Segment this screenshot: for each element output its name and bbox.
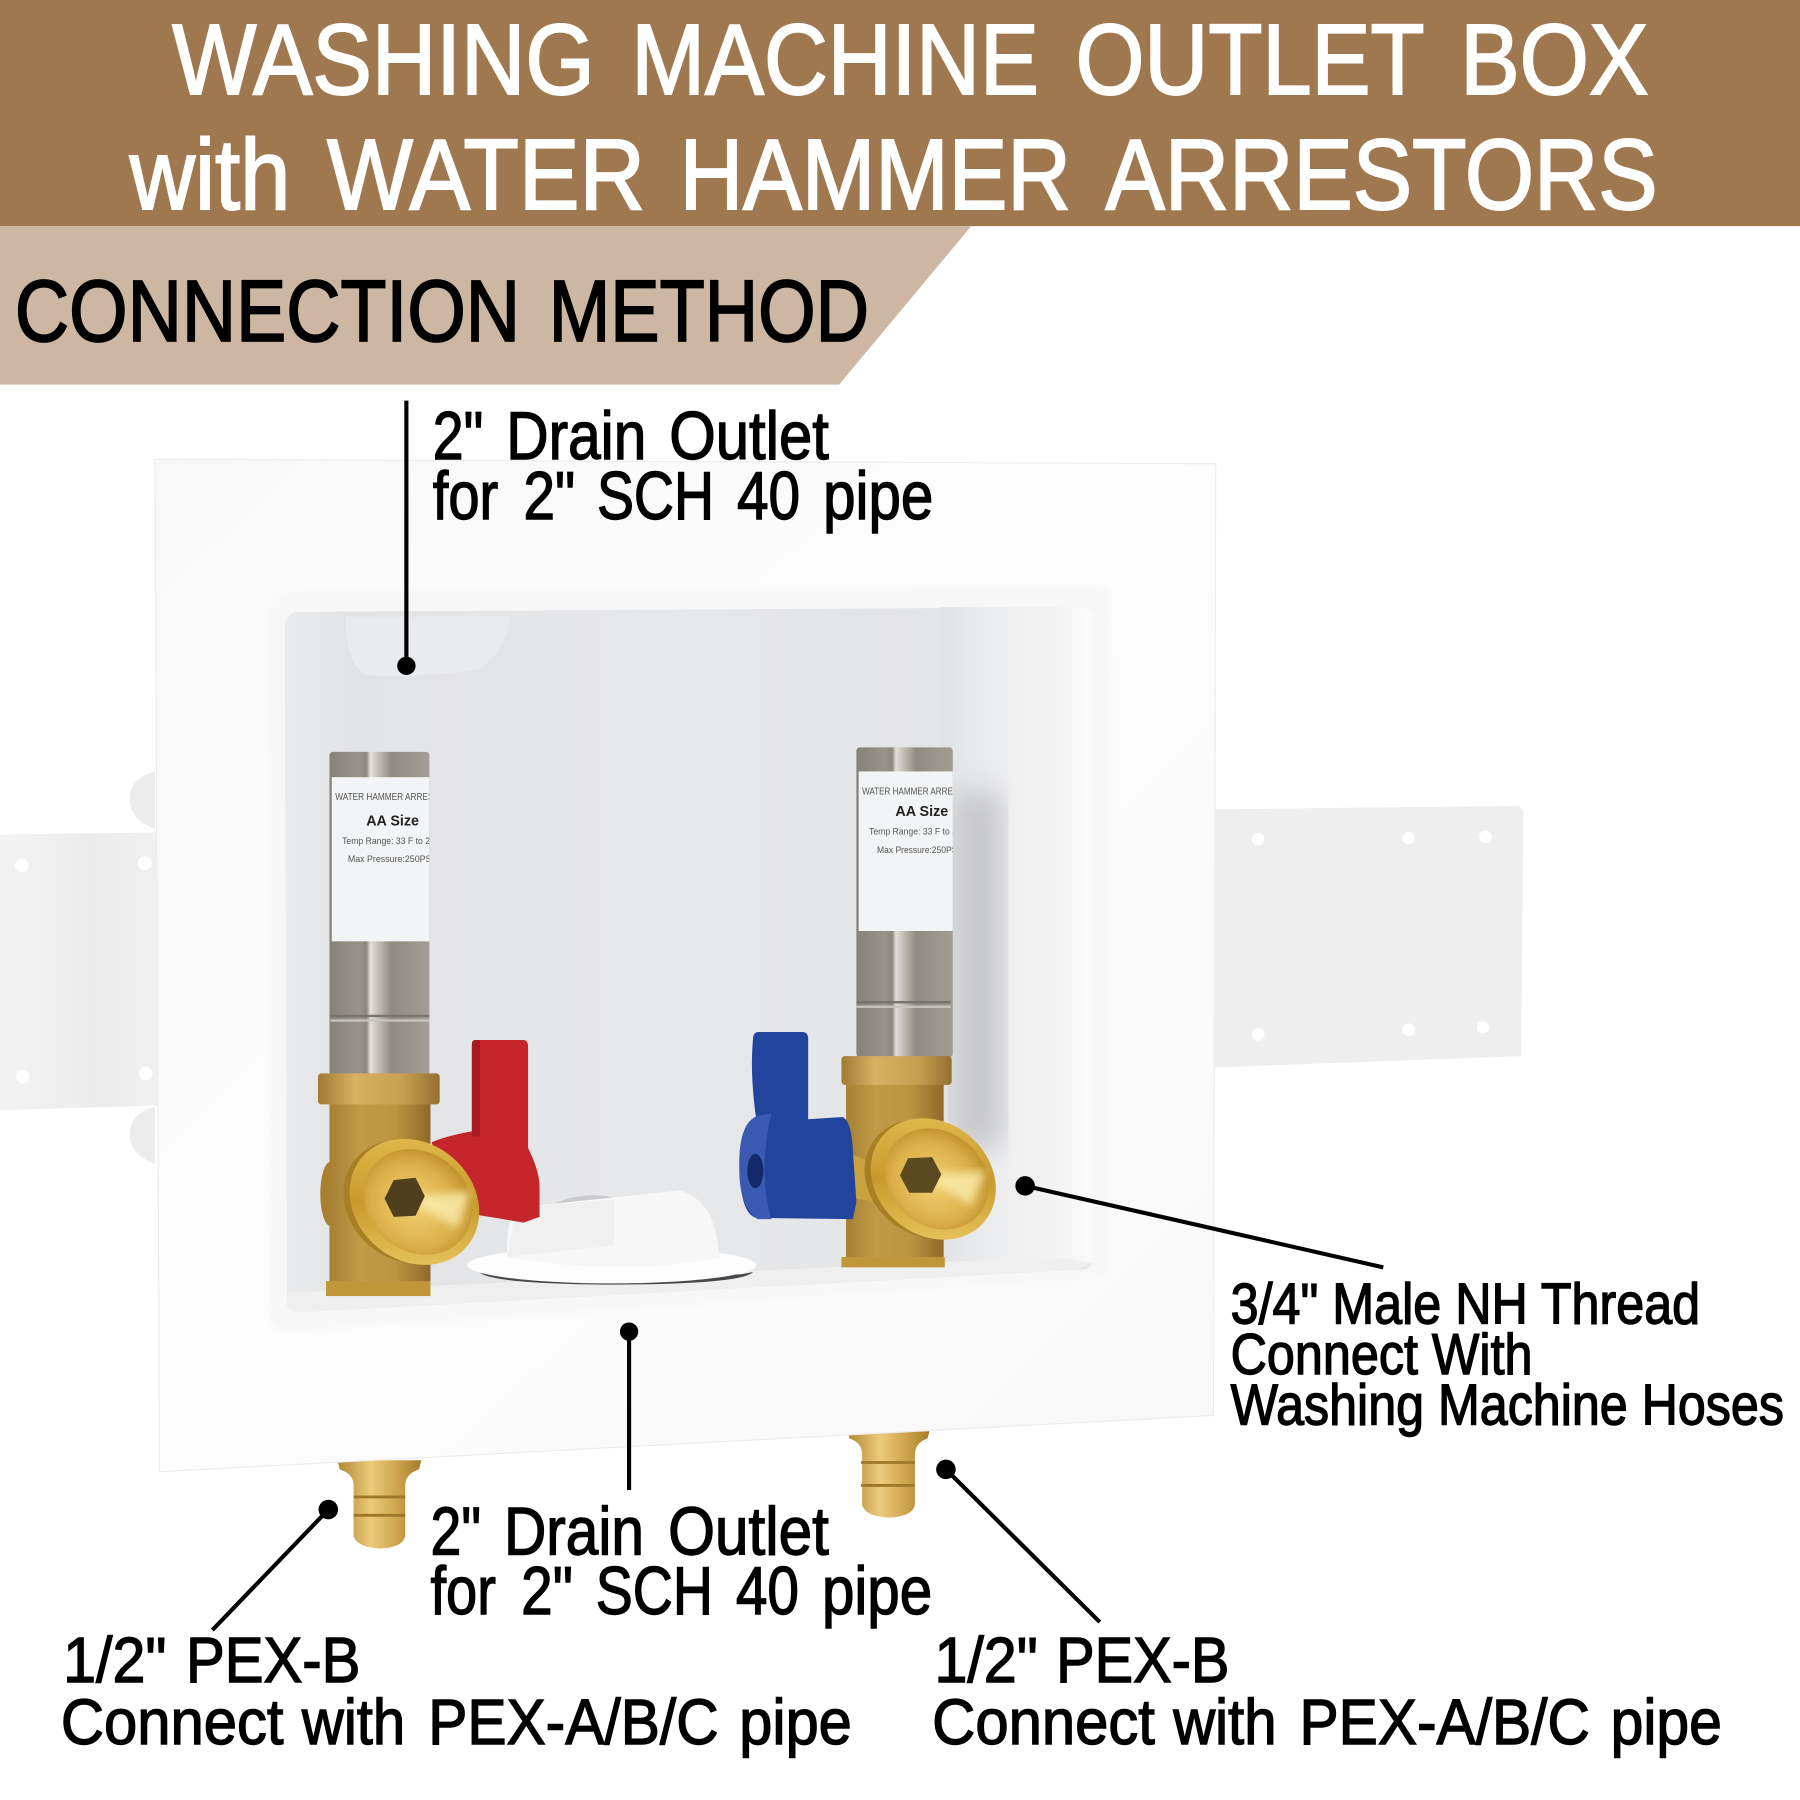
callout: top drain outlet: 2" xyxy=(433,399,483,474)
callout: top drain outlet: 2" xyxy=(523,459,575,534)
callout: left PEX-B xyxy=(61,1500,852,1758)
title banner: WATER xyxy=(327,120,645,231)
right mounting flange xyxy=(1211,806,1523,1068)
callout: bottom drain outlet: 2" xyxy=(430,1494,481,1569)
callout: right PEX-B: with xyxy=(1172,1686,1277,1758)
product illustration: outlet box xyxy=(0,459,1523,1549)
callout: bottom drain outlet: 2" xyxy=(521,1554,573,1629)
callout: top drain outlet: 40 xyxy=(737,459,800,534)
callout: left PEX-B: pipe xyxy=(739,1686,852,1758)
callout: left PEX-B: 1/2" xyxy=(63,1624,166,1696)
box face xyxy=(155,459,1216,1472)
callout: right PEX-B: Connect xyxy=(932,1686,1155,1758)
brass valve stem xyxy=(849,1154,875,1202)
PEX fitting: left xyxy=(338,1460,421,1549)
arrestor label text: Max Pressure:250PSI xyxy=(348,854,434,864)
title banner: WASHING xyxy=(172,5,595,116)
callout: bottom drain outlet: Drain xyxy=(504,1494,644,1569)
callout: right PEX-B xyxy=(932,1460,1722,1758)
callout: left PEX-B: PEX-A/B/C xyxy=(428,1686,719,1758)
title banner: ARRESTORS xyxy=(1105,120,1658,231)
callout: top drain outlet: Outlet xyxy=(669,399,829,474)
callout: hose thread: Connect With xyxy=(1231,1323,1533,1387)
recess floor ledge xyxy=(287,1257,1095,1312)
callout: right PEX-B: 1/2" xyxy=(934,1624,1038,1696)
top drain opening xyxy=(346,616,510,676)
recess right side wall xyxy=(940,607,1093,1263)
section heading: connection method: CONNECTION xyxy=(15,263,520,360)
section heading: connection method: METHOD xyxy=(549,263,869,360)
brass body xyxy=(846,1079,944,1260)
callout: bottom drain outlet: for xyxy=(430,1554,496,1629)
callout: top drain outlet: SCH xyxy=(597,459,714,534)
red handle xyxy=(432,1040,540,1223)
callout: top drain outlet: Drain xyxy=(506,399,646,474)
callout: hose thread xyxy=(1015,1176,1784,1438)
arrestor label text: WATER HAMMER ARREST xyxy=(862,786,963,797)
blue handle xyxy=(740,1032,856,1219)
callout: hose thread: 3/4" Male NH Thread xyxy=(1231,1273,1700,1337)
callout: bottom drain outlet: pipe xyxy=(822,1554,932,1629)
callout: right PEX-B: PEX-B xyxy=(1056,1624,1229,1696)
recess back wall xyxy=(285,607,1093,1312)
arrestor label text xyxy=(335,793,430,862)
arrestor label text: Temp Range: 33 F to 200 xyxy=(869,827,967,837)
arrestor label text: AA Size xyxy=(895,804,948,820)
arrestor label text xyxy=(862,788,953,853)
callout: bottom drain outlet xyxy=(430,1322,932,1629)
brass body xyxy=(320,1162,341,1226)
callout: top drain outlet xyxy=(397,399,933,675)
callout: right PEX-B: PEX-A/B/C xyxy=(1299,1686,1590,1758)
callout: bottom drain outlet: 40 xyxy=(736,1554,799,1629)
shadow beside right arrestor xyxy=(953,792,1003,1148)
left mounting flange xyxy=(0,771,157,1164)
callout: bottom drain outlet: SCH xyxy=(596,1554,713,1629)
water hammer arrestor and valve: red (hot) xyxy=(318,752,540,1296)
recess bevelled lip xyxy=(269,585,1111,1332)
callout: bottom drain outlet: Outlet xyxy=(668,1494,829,1569)
callout: left PEX-B: PEX-B xyxy=(186,1624,360,1696)
title banner: with xyxy=(129,120,290,231)
arrestor label text: Max Pressure:250PSI xyxy=(877,845,960,855)
callout: left PEX-B: with xyxy=(301,1686,405,1758)
title banner: MACHINE xyxy=(631,5,1039,116)
callout: right PEX-B: pipe xyxy=(1611,1686,1722,1758)
water hammer arrestor and valve: blue (cold) xyxy=(739,747,1020,1267)
arrestor label text: Temp Range: 33 F to 200 xyxy=(342,836,440,846)
PEX fitting: right xyxy=(847,1429,930,1518)
brass hose thread fitting xyxy=(318,1113,505,1291)
title banner: BOX xyxy=(1460,5,1648,116)
brass hose thread fitting xyxy=(841,1093,1020,1265)
callout: top drain outlet: pipe xyxy=(823,459,933,534)
title banner: OUTLET xyxy=(1076,5,1425,116)
title banner: HAMMER xyxy=(680,120,1071,231)
title banner xyxy=(0,0,1800,231)
drain cap xyxy=(467,1190,757,1285)
callout: left PEX-B: Connect xyxy=(61,1686,284,1758)
section heading: connection method xyxy=(0,226,971,385)
arrestor label text: WATER HAMMER ARREST xyxy=(335,792,439,803)
arrestor label text: AA Size xyxy=(366,813,419,829)
callout: top drain outlet: for xyxy=(433,459,498,534)
